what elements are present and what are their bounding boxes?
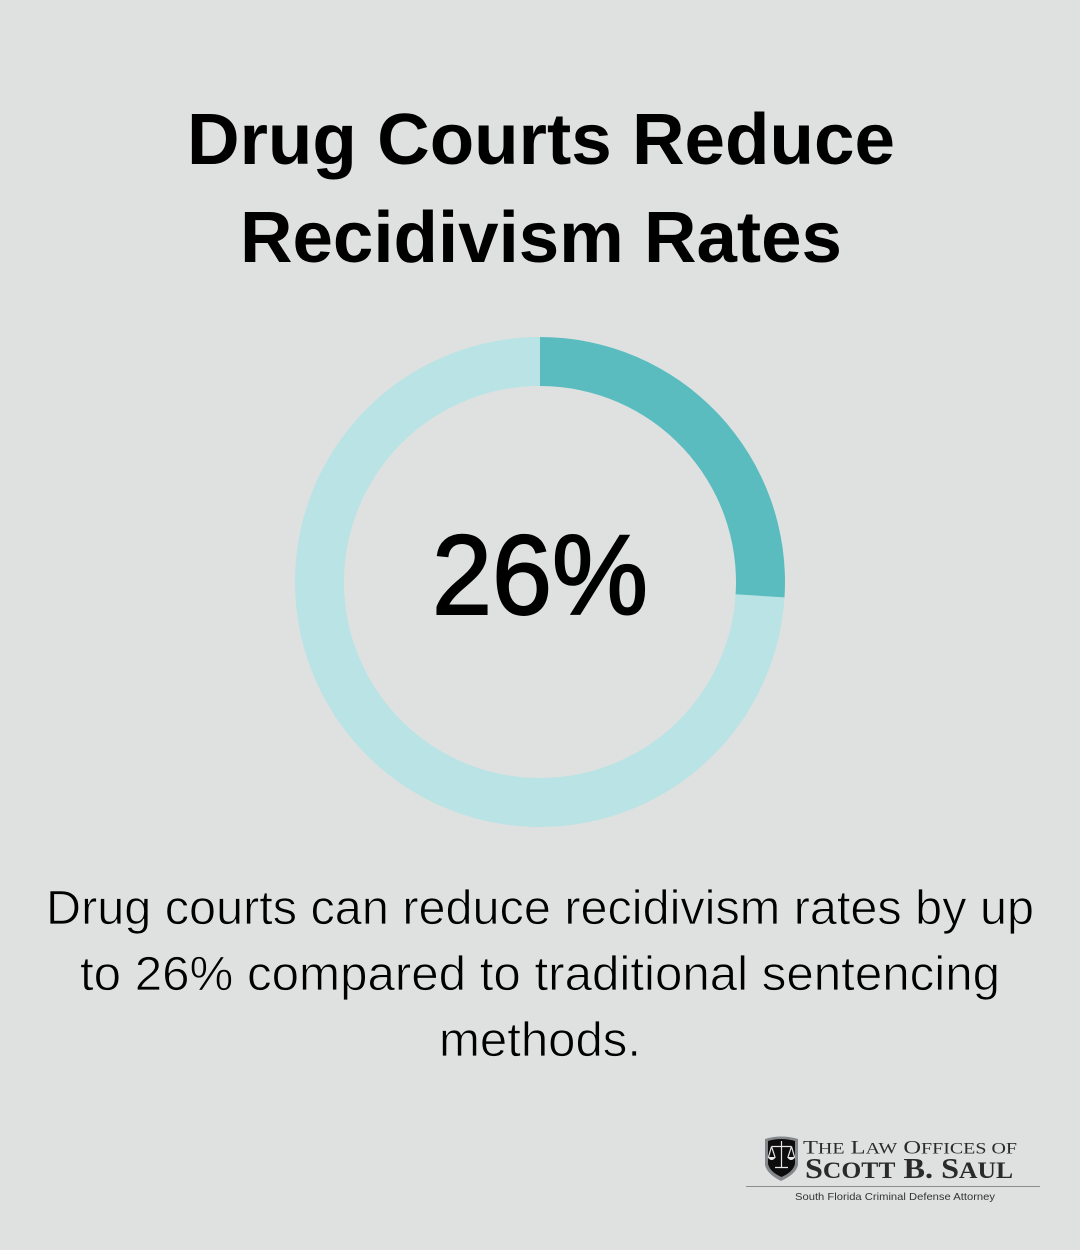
logo: The Law Offices of Scott B. Saul xyxy=(746,1136,1040,1203)
title xyxy=(187,100,895,278)
donut value: 26% xyxy=(432,512,648,638)
logo firm name xyxy=(803,1138,1017,1185)
logo firm name: THE L AW O FFICES OF xyxy=(803,1138,1017,1158)
title: Recidivism Rates xyxy=(240,198,842,278)
logo tagline: South Florida Criminal Defense Attorney xyxy=(795,1191,996,1203)
title: Drug Courts Reduce xyxy=(187,100,895,180)
description text: to 26% compared to traditional sentencing xyxy=(80,948,1000,1001)
donut chart: 26% xyxy=(320,337,785,802)
description text xyxy=(46,882,1034,1067)
icon: scales of justice shield xyxy=(765,1136,798,1181)
description text: Drug courts can reduce recidivism rates by up xyxy=(46,882,1034,935)
logo firm name: SCOTT B. S AUL xyxy=(805,1153,1013,1185)
description text: methods. xyxy=(439,1014,641,1067)
